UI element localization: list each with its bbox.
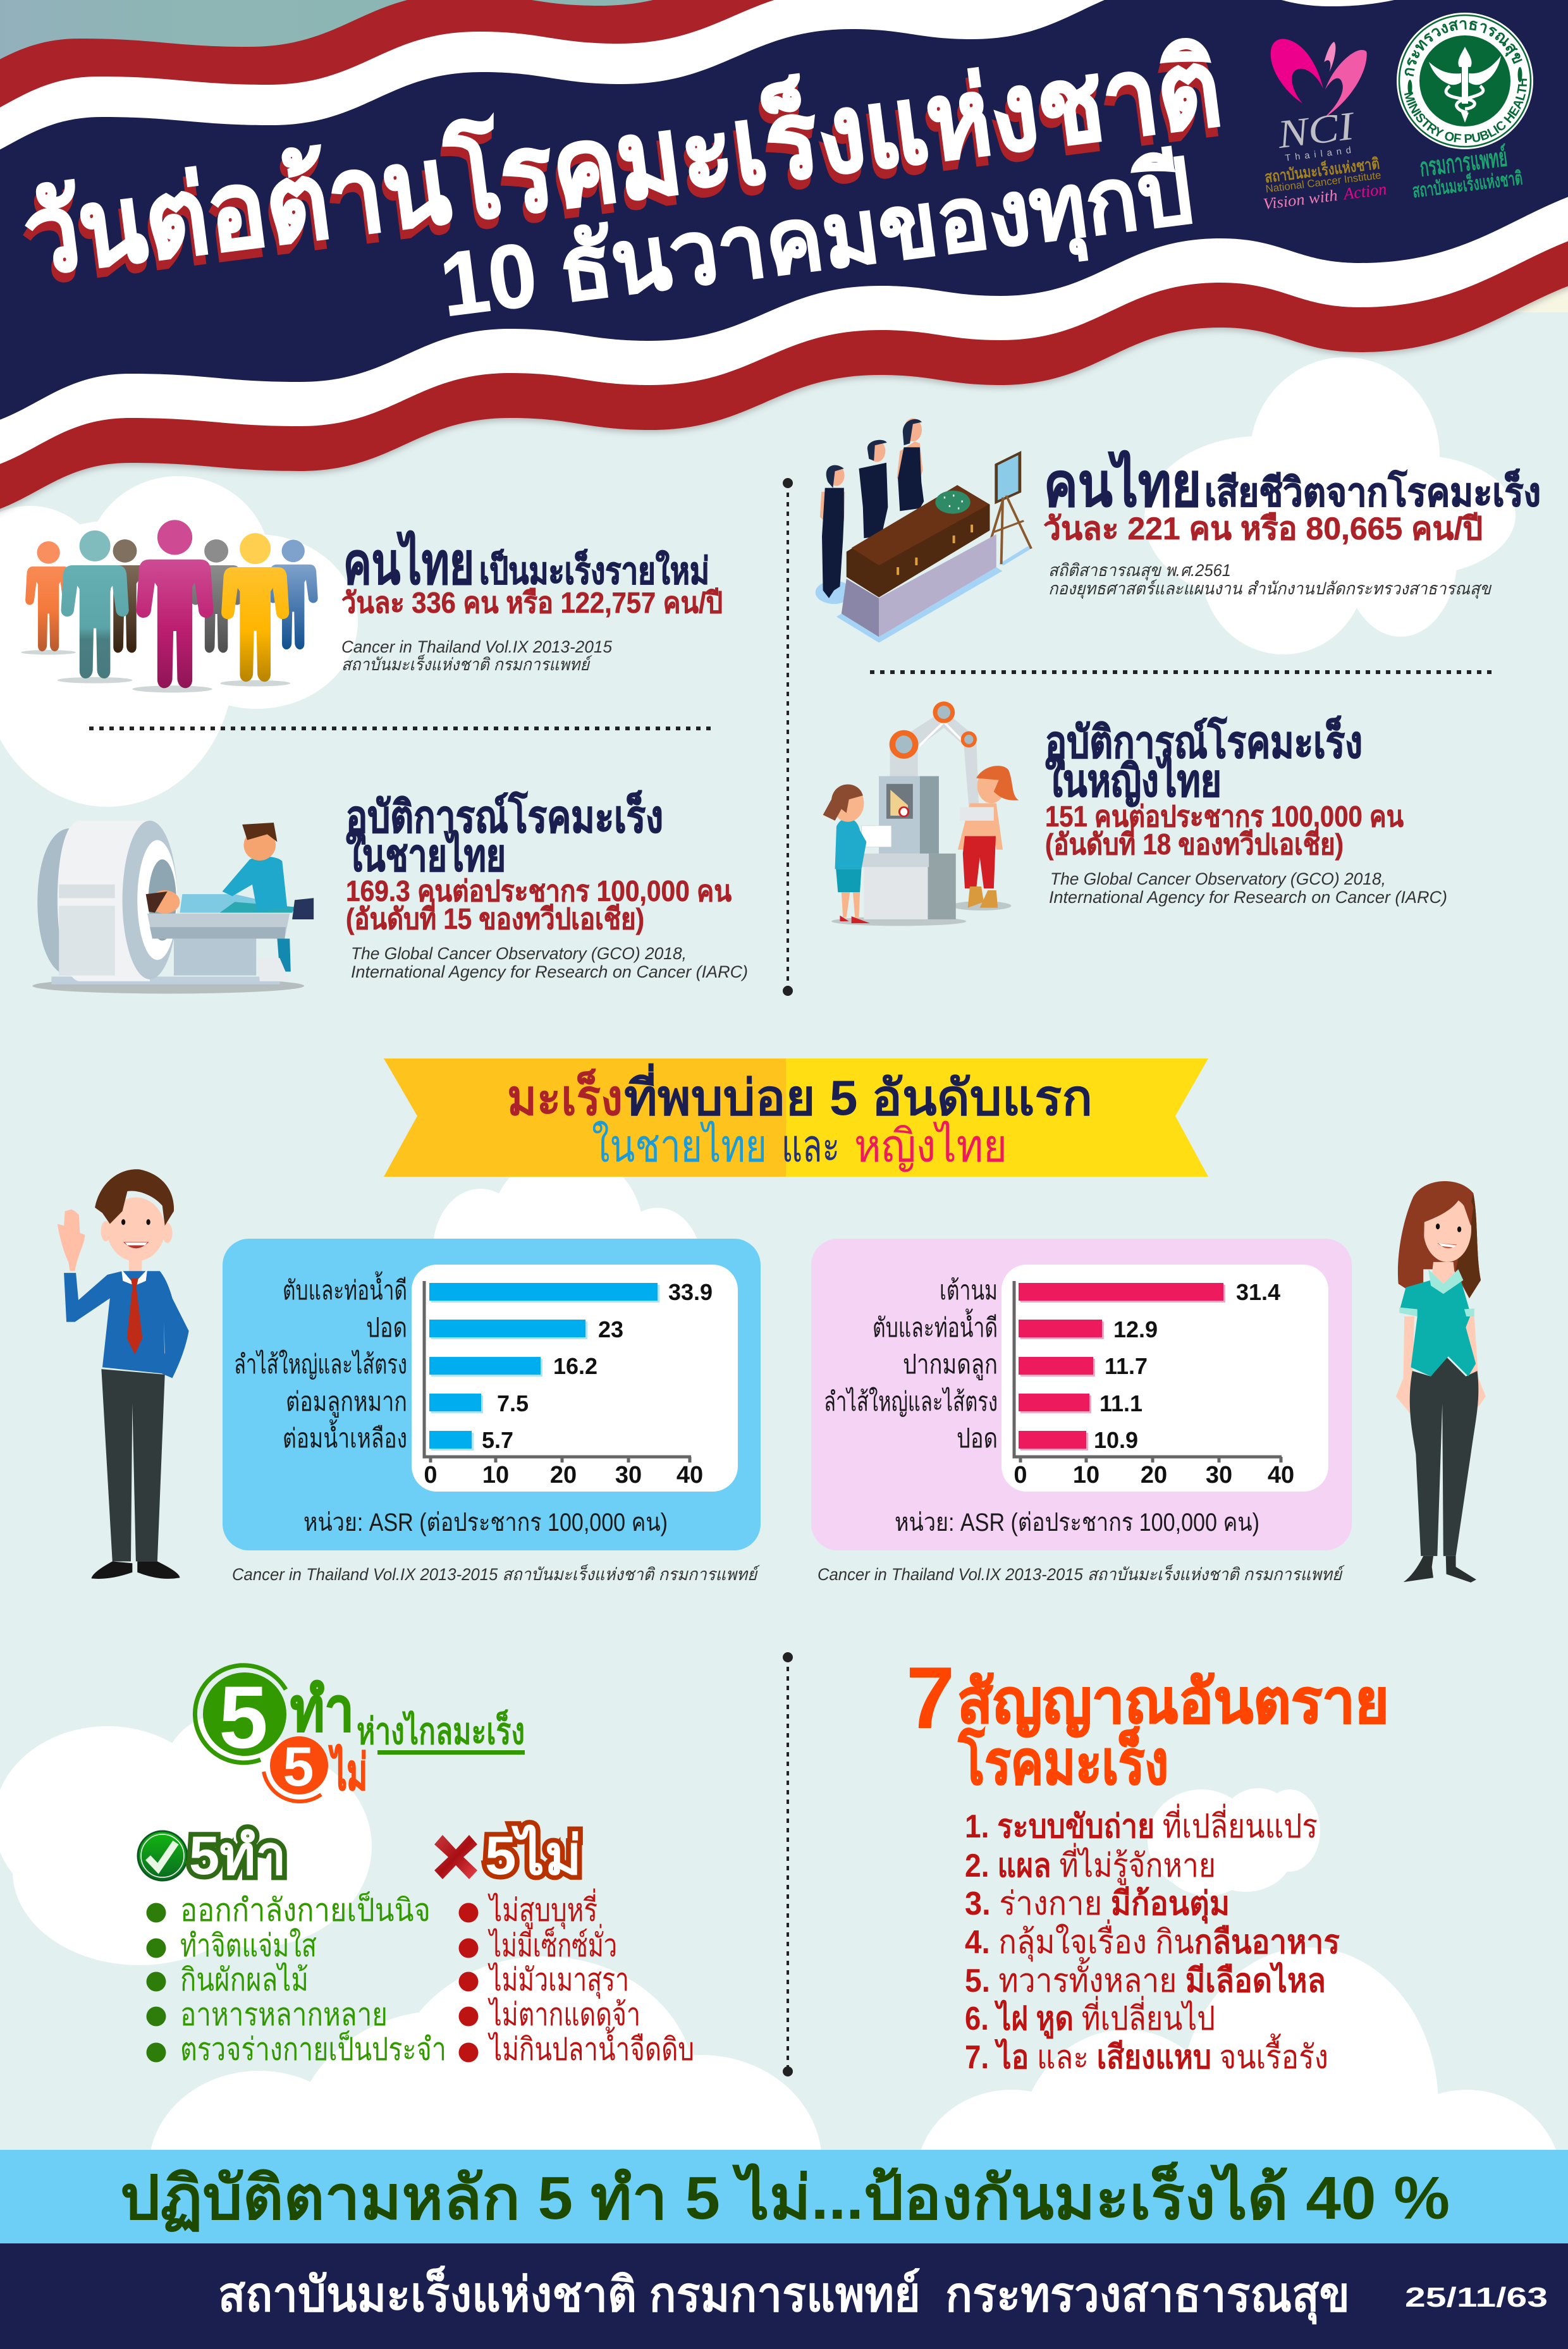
category labels: women: [824, 1275, 998, 1453]
source: men chart: Cancer in Thailand Vol.IX 2013-2015 สถาบันมะเร็งแห่งชาติ กรมการแพทย์: [232, 1564, 761, 1584]
stat: deaths: [1043, 450, 1541, 599]
cloud: behind male chart: [433, 1151, 702, 1322]
logo: National Cancer Institute: NCI: [1275, 103, 1358, 157]
axis numbers: women: 0: [1014, 1462, 1027, 1488]
values: men: 16.2: [553, 1353, 597, 1379]
heading: five do five don't: ห่างไกลมะเร็ง: [357, 1709, 525, 1752]
values: women: 10.9: [1094, 1427, 1138, 1453]
stat: female incidence: ในหญิงไทย: [1045, 755, 1222, 807]
logo: National Cancer Institute: Action: [1341, 179, 1388, 204]
stat: female incidence: อุบัติการณ์โรคมะเร็ง: [1045, 715, 1363, 770]
stat: new cancer cases: สถาบันมะเร็งแห่งชาติ กรมการแพทย์: [341, 654, 593, 674]
values: women: 12.9: [1113, 1316, 1158, 1342]
ribbon banner: top five cancers: ในชายไทย: [592, 1120, 767, 1172]
stat: male incidence: [346, 790, 748, 981]
heading: five do five don't: [195, 1665, 525, 1801]
category labels: men: ปอด: [366, 1313, 407, 1342]
list: five don't: ไม่สูบบุหรี่: [487, 1889, 597, 1929]
list: five don't: ไม่กินปลาน้ำจืดดิบ: [487, 2027, 694, 2067]
category labels: women: ปากมดลูก: [903, 1349, 998, 1380]
logo: National Cancer Institute: National Cancer Institute: [1265, 169, 1381, 195]
list: seven warning signs: 1. ระบบขับถ่าย ที่เปลี่ยนแปร: [965, 1803, 1318, 1845]
heading: five do five don't: ไม่: [329, 1744, 367, 1800]
heading: seven warning signs: สัญญาณอันตราย: [957, 1668, 1389, 1738]
illustration: mammogram machine: [823, 701, 1019, 926]
stat: male incidence: อุบัติการณ์โรคมะเร็ง: [346, 790, 663, 845]
title: วันต่อต้านโรคมะเร็งแห่งชาติ: [15, 31, 1226, 307]
stat: deaths: วันละ 221 คน หรือ 80,665 คน/ปี: [1043, 511, 1483, 546]
stat: female incidence: International Agency for Research on Cancer (IARC): [1049, 888, 1447, 907]
category labels: men: ต่อมลูกหมาก: [286, 1387, 407, 1418]
logo: Ministry of Public Health: [1397, 13, 1533, 149]
stat: deaths: กองยุทธศาสตร์และแผนงาน สำนักงานปลัดกระทรวงสาธารณสุข: [1048, 579, 1491, 599]
divider dotted lines: [89, 478, 1497, 2076]
list: five don't: ไม่มัวเมาสุรา: [487, 1962, 629, 1999]
axis numbers: women: 10: [1073, 1462, 1099, 1488]
band: prevention message: ปฏิบัติตามหลัก 5 ทำ 5 ไม่...ป้องกันมะเร็งได้ 40 %: [120, 2161, 1450, 2233]
category labels: women: ลำไส้ใหญ่และไส้ตรง: [824, 1387, 998, 1417]
axis numbers: women: [1014, 1462, 1294, 1488]
list: seven warning signs: 3. ร่างกาย มีก้อนตุ่ม: [965, 1886, 1230, 1924]
values: men: 23: [598, 1316, 623, 1342]
subheading: five don't: 5ไม่: [485, 1824, 582, 1886]
list: five do: ตรวจร่างกายเป็นประจำ: [180, 2030, 446, 2067]
axis numbers: men: 20: [550, 1462, 577, 1488]
icon: green check: [138, 1831, 187, 1880]
chart panel: women: หน่วย: ASR (ต่อประชากร 100,000 คน): [895, 1509, 1259, 1536]
band: prevention message: [0, 2150, 1568, 2243]
axis numbers: women: 20: [1141, 1462, 1167, 1488]
axis numbers: men: 40: [677, 1462, 703, 1488]
stat: female incidence: The Global Cancer Observatory (GCO) 2018,: [1050, 869, 1386, 888]
stat: female incidence: [1045, 715, 1447, 907]
list: five do: อาหารหลากหลาย: [180, 1997, 388, 2032]
bars: women: [1019, 1283, 1225, 1450]
stat: male incidence: The Global Cancer Observatory (GCO) 2018,: [351, 944, 687, 963]
category labels: men: ต่อมน้ำเหลือง: [283, 1419, 407, 1453]
values: women: 11.1: [1099, 1390, 1142, 1416]
category labels: men: ลำไส้ใหญ่และไส้ตรง: [234, 1349, 407, 1380]
cloud: upper right: [1144, 357, 1516, 654]
values: men: [482, 1279, 713, 1453]
axis numbers: men: [424, 1462, 703, 1488]
category labels: women: ตับและท่อน้ำดี: [873, 1308, 998, 1342]
cloud: behind seven signs: [1148, 1788, 1320, 1896]
list: five don't: [459, 1889, 694, 2067]
stat: new cancer cases: Cancer in Thailand Vol.IX 2013-2015: [341, 637, 613, 656]
cloud: upper left: [0, 476, 358, 807]
chart panel: women: [811, 1239, 1352, 1550]
stat: deaths: คนไทย: [1044, 450, 1201, 519]
values: men: 33.9: [668, 1279, 713, 1305]
ribbon banner: top five cancers: หญิงไทย: [854, 1120, 1007, 1172]
cloud: bottom centre: [149, 1956, 822, 2289]
heading: five do five don't: 5: [219, 1667, 268, 1767]
values: men: 7.5: [497, 1390, 529, 1416]
illustration: man waving: [58, 1169, 189, 1579]
axis numbers: women: 40: [1268, 1462, 1294, 1488]
bars: men: [429, 1283, 659, 1450]
stat: new cancer cases: คนไทย: [343, 531, 474, 596]
stat: male incidence: 169.3 คนต่อประชากร 100,000 คน: [346, 874, 732, 907]
logo: National Cancer Institute: [1253, 39, 1388, 213]
ribbon banner: top five cancers: [384, 1058, 1208, 1177]
logo: National Cancer Institute: Vision with: [1262, 187, 1338, 213]
header: Thai flag wave bands: [0, 0, 1568, 519]
axis numbers: men: 10: [482, 1462, 509, 1488]
values: women: 31.4: [1236, 1279, 1280, 1305]
axis numbers: women: 30: [1206, 1462, 1232, 1488]
heading: five do five don't: 5: [283, 1735, 314, 1798]
category labels: men: [234, 1271, 407, 1453]
list: five do: กินผักผลไม้: [180, 1962, 309, 1997]
illustration: MRI scanner with doctor and patient: [32, 821, 314, 993]
footer: organisations and date: [0, 2243, 1568, 2349]
list: five don't: ไม่ตากแดดจ้า: [487, 1997, 640, 2032]
stat: male incidence: (อันดับที่ 15 ของทวีปเอเชีย): [346, 899, 644, 935]
logo caption: Department of Medical Services: [1408, 142, 1524, 202]
list: seven warning signs: 5. ทวารทั้งหลาย มีเลือดไหล: [965, 1957, 1326, 1999]
list: five do: [147, 1891, 446, 2067]
list: five do: ออกกำลังกายเป็นนิจ: [180, 1891, 431, 1928]
category labels: women: ปอด: [957, 1423, 998, 1453]
footer: organisations and date: 25/11/63: [1405, 2282, 1548, 2313]
ribbon banner: top five cancers: ที่พบบ่อย 5 อันดับแรก: [624, 1063, 1093, 1125]
stat: female incidence: 151 คนต่อประชากร 100,000 คน: [1045, 800, 1404, 833]
illustration: mourners beside coffin: [816, 418, 1031, 642]
cloud: bottom right: [917, 1947, 1562, 2273]
title: วันต่อต้านโรคมะเร็งแห่งชาติ: [17, 21, 1228, 298]
stat: deaths: สถิติสาธารณสุข พ.ศ.2561: [1048, 561, 1231, 581]
list: seven warning signs: 2. แผล ที่ไม่รู้จักหาย: [965, 1843, 1216, 1886]
ribbon banner: top five cancers: มะเร็ง: [507, 1069, 623, 1125]
values: men: 5.7: [482, 1427, 513, 1453]
stat: female incidence: (อันดับที่ 18 ของทวีปเอเชีย): [1045, 824, 1344, 861]
stat: male incidence: International Agency for Research on Cancer (IARC): [351, 962, 748, 981]
footer: organisations and date: สถาบันมะเร็งแห่งชาติ กรมการแพทย์ กระทรวงสาธารณสุข: [218, 2266, 1350, 2325]
illustration: woman standing: [1396, 1181, 1486, 1583]
chart panel: men: หน่วย: ASR (ต่อประชากร 100,000 คน): [303, 1509, 668, 1536]
stat: new cancer cases: [341, 531, 723, 674]
illustration: crowd of people: [21, 520, 318, 692]
stat: deaths: เสียชีวิตจากโรคมะเร็ง: [1204, 469, 1541, 515]
ribbon banner: top five cancers: และ: [781, 1121, 840, 1172]
logo: Ministry of Public Health: กระทรวงสาธารณสุข: [1405, 20, 1522, 77]
list: seven warning signs: 6. ไฝ หูด ที่เปลี่ยนไป: [965, 1996, 1215, 2039]
heading: five do five don't: ทำ: [290, 1676, 354, 1744]
axis numbers: men: 0: [424, 1462, 438, 1488]
logo: National Cancer Institute: สถาบันมะเร็งแห่งชาติ: [1263, 154, 1380, 187]
heading: seven warning signs: โรคมะเร็ง: [958, 1726, 1168, 1797]
chart panel: men: [223, 1239, 761, 1550]
category labels: men: ตับและท่อน้ำดี: [283, 1271, 407, 1305]
subheading: five do: 5ทำ: [189, 1825, 286, 1886]
icon: red cross: [434, 1835, 477, 1879]
list: seven warning signs: 7. ไอ และ เสียงแหบ จนเรื้อรัง: [965, 2033, 1328, 2076]
category labels: women: เต้านม: [940, 1275, 998, 1305]
logo: Ministry of Public Health: MINISTRY OF PUBLIC HEALTH: [1404, 78, 1528, 143]
values: women: 11.7: [1105, 1353, 1148, 1379]
list: seven warning signs: [965, 1803, 1340, 2076]
logo: National Cancer Institute: Thailand: [1285, 145, 1352, 164]
cloud: behind five do list: [0, 1714, 372, 1965]
axis numbers: men: 30: [615, 1462, 642, 1488]
values: women: [1094, 1279, 1280, 1453]
stat: new cancer cases: เป็นมะเร็งรายใหม่: [479, 549, 709, 592]
stat: male incidence: ในชายไทย: [346, 830, 506, 880]
heading: seven warning signs: [906, 1649, 1389, 1797]
list: seven warning signs: 4. กลุ้มใจเรื่อง กินกลืนอาหาร: [965, 1919, 1340, 1962]
source: women chart: Cancer in Thailand Vol.IX 2013-2015 สถาบันมะเร็งแห่งชาติ กรมการแพทย์: [818, 1564, 1345, 1584]
stat: new cancer cases: วันละ 336 คน หรือ 122,757 คน/ปี: [341, 586, 723, 619]
title: 10 ธันวาคมของทุกปี: [435, 141, 1199, 341]
heading: seven warning signs: 7: [906, 1649, 955, 1747]
list: five don't: ไม่มีเซ็กซ์มั่ว: [487, 1924, 617, 1963]
list: five do: ทำจิตแจ่มใส: [180, 1928, 317, 1963]
